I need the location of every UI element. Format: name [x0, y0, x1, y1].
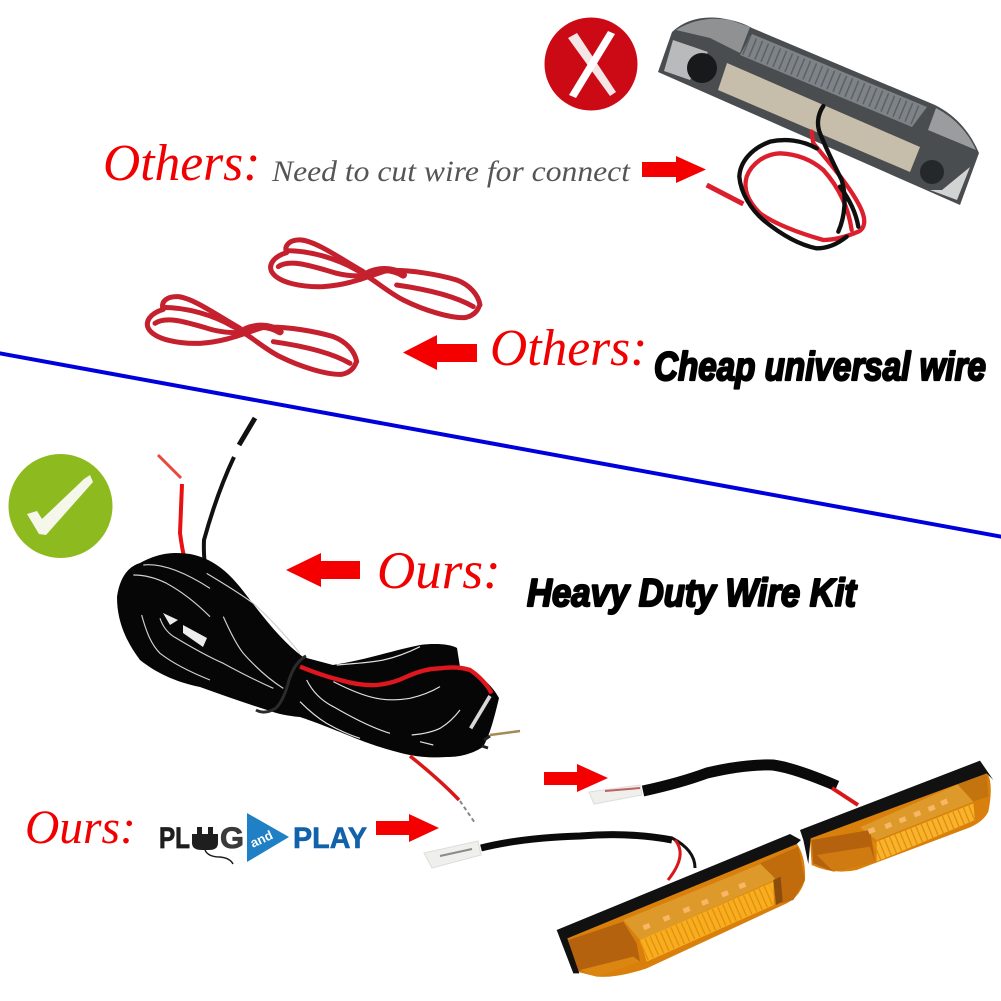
product photo: smoked lamp with cut wires: [658, 18, 979, 248]
text: others need to cut wire: Need to cut wire for connect: [271, 155, 631, 188]
ribbed strip: [740, 34, 927, 127]
lower red lead: [410, 756, 459, 800]
logo: plug and play: G: [220, 822, 244, 855]
text: ours heavy duty wire kit: Heavy Duty Wire Kit: [527, 572, 858, 615]
logo: plug and play: [159, 813, 367, 864]
coiled cable body: [117, 553, 499, 757]
arrow: to cut wire: [642, 156, 706, 183]
arrow: to lower connector: [376, 814, 439, 842]
text: others need to cut wire: Others:: [103, 135, 260, 192]
ring terminals: [490, 731, 520, 735]
text: others cheap universal wire: Others:: [490, 320, 647, 377]
logo: plug and play: PL: [159, 822, 190, 855]
text: ours heavy duty wire kit: Ours:: [377, 542, 501, 600]
text: others cheap universal wire: [490, 320, 986, 389]
arrow: to harness: [286, 553, 360, 587]
icon: green check badge: [8, 454, 112, 558]
text: others need to cut wire: [103, 135, 631, 192]
arrow: to upper connector: [544, 764, 608, 792]
logo: plug and play: PLAY: [293, 822, 367, 855]
text: ours: Ours:: [25, 802, 136, 854]
product photo: lower connector and lead: [424, 835, 695, 880]
icon: red X badge: [544, 18, 638, 110]
lamp body: [658, 18, 979, 205]
highlights right lobe: [300, 647, 492, 745]
red lead loop: [707, 132, 864, 240]
text: ours heavy duty wire kit: [377, 542, 858, 615]
divider line: blue diagonal: [0, 353, 1001, 537]
arrow: to cheap wire: [403, 335, 477, 370]
logo: plug and play: and: [248, 827, 275, 851]
cable tie: [256, 656, 306, 712]
product photo: heavy duty wire harness: [117, 418, 520, 823]
black lead: [239, 418, 255, 445]
product photo: upper connector and lead: [589, 765, 858, 805]
product photo: amber lamp right: [800, 761, 993, 872]
black lead loop: [739, 106, 858, 248]
left end cap: [676, 19, 750, 53]
white gap in coil: [163, 613, 207, 647]
product photo: amber lamp left: [557, 834, 805, 977]
highlights left loop: [133, 565, 300, 688]
product photo: cheap red wire lower: [147, 297, 357, 374]
joint highlight: [471, 696, 490, 728]
product photo: cheap red wire upper: [271, 240, 480, 318]
red lead: [158, 455, 181, 478]
beige centre: [718, 63, 920, 172]
mounting knobs: [687, 53, 717, 83]
red stripe on cable: [300, 667, 492, 693]
right end cap: [928, 108, 976, 150]
